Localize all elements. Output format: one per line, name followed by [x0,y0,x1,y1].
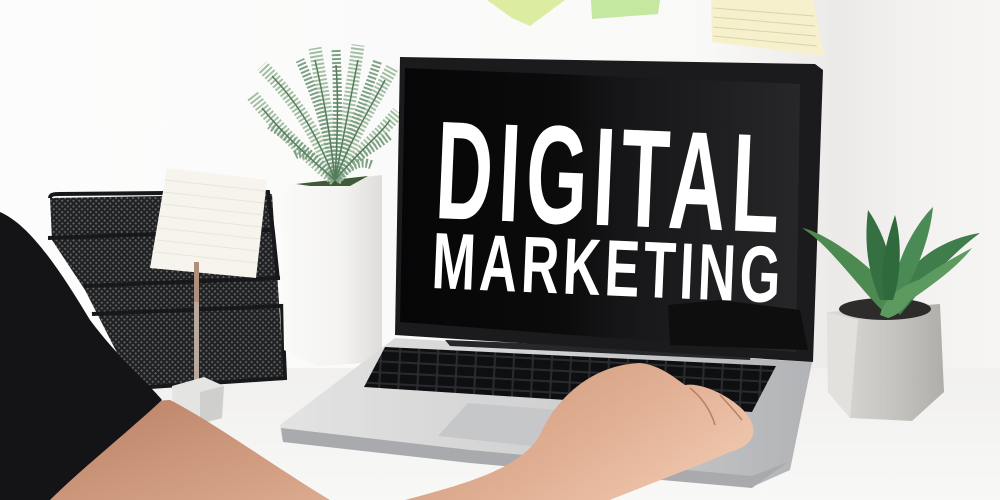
wall background [0,0,1000,380]
laptop base and keyboard [280,338,812,488]
succulent in concrete pot [802,207,980,421]
desk surface [0,368,1000,500]
person's forearm and hand [48,363,753,500]
laptop screen [395,57,823,362]
white note card on clip stand [150,168,267,424]
sticky notes on wall [487,0,824,56]
black t-shirt shoulder [0,212,162,500]
wire mesh file organizer [48,192,285,388]
word: DIGITAL: DIGITAL [433,93,789,263]
tall plant in white vase [252,45,398,366]
screen title: DIGITAL MARKETING [430,93,789,320]
word: MARKETING: MARKETING [430,217,786,320]
